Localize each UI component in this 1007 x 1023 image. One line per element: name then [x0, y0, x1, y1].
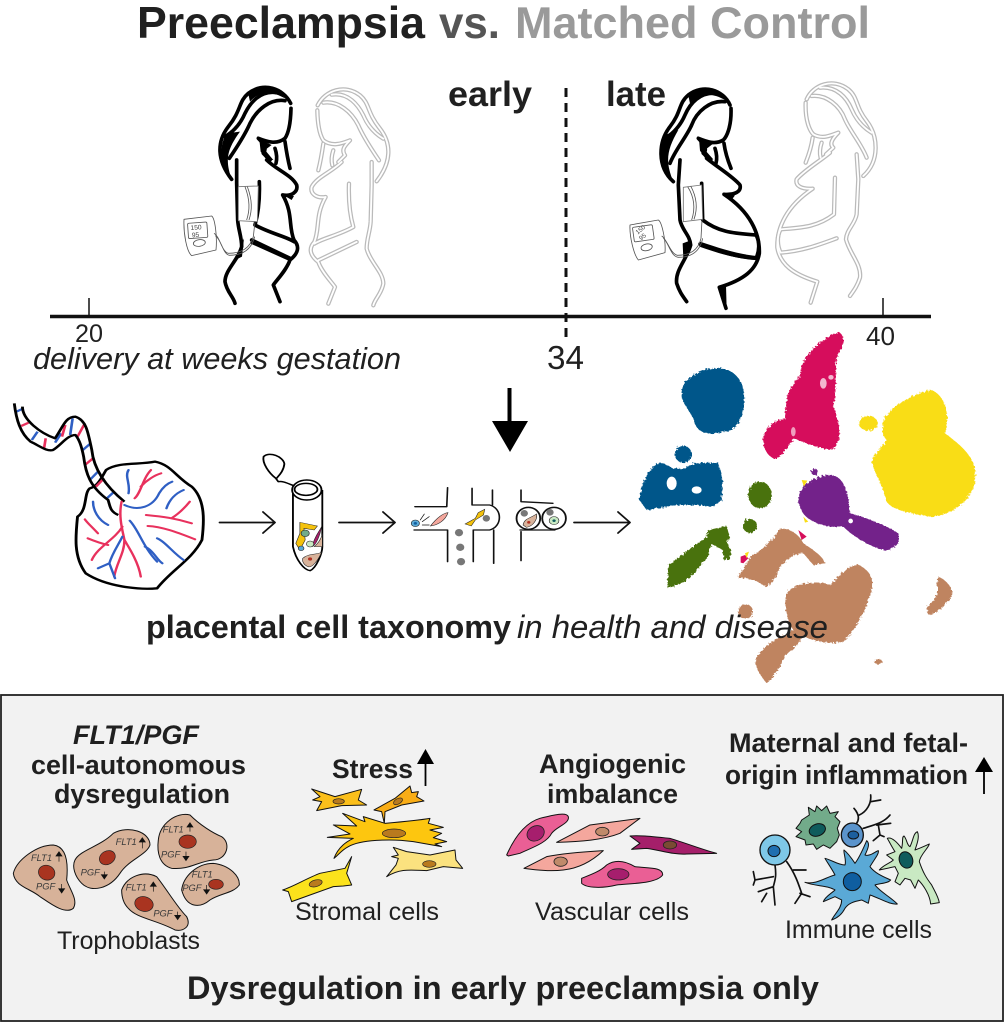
heading: inflammation up: origin inflammation — [725, 760, 968, 790]
icon: trophoblast cells: FLT1 — [116, 837, 137, 847]
title — [137, 0, 870, 48]
heading: angiogenic imbalance: imbalance — [547, 779, 678, 809]
figure: early preeclampsia woman with monitor: 95 — [192, 232, 200, 239]
title: Matched Control — [515, 0, 870, 48]
figure: late preeclampsia woman with monitor — [630, 89, 759, 309]
heading: angiogenic imbalance: Angiogenic — [539, 749, 686, 779]
figure: early preeclampsia woman with monitor — [184, 87, 298, 303]
heading: placental cell taxonomy: in health and disease — [517, 608, 828, 645]
heading: angiogenic imbalance — [539, 749, 686, 809]
icon: trophoblast cells: FLT1 — [31, 853, 52, 863]
figure: late preeclampsia woman with monitor: 95 — [638, 232, 648, 242]
icon: trophoblast cells: FLT1 — [126, 883, 147, 893]
figure: early matched control woman — [311, 89, 388, 305]
figure: early preeclampsia woman with monitor: 150 — [190, 224, 202, 232]
icon: immune cells — [753, 795, 939, 920]
label: early: early — [448, 74, 532, 114]
label: late: late — [606, 74, 666, 114]
heading: FLT1/PGF: FLT1/PGF — [73, 720, 200, 750]
immune column — [725, 728, 993, 944]
panel: dysregulation summary — [1, 695, 1003, 1021]
icon: stromal cells — [283, 786, 463, 902]
heading: placental cell taxonomy: placental cell taxonomy — [146, 609, 511, 645]
icon: trophoblast cells — [13, 814, 239, 930]
icon: trophoblast cells: PGF — [81, 868, 101, 878]
title: vs. — [439, 0, 500, 48]
heading: stress up: Stress — [332, 754, 413, 784]
icon: microfluidic chip — [411, 488, 566, 565]
icon: trophoblast cells: PGF — [161, 850, 181, 860]
heading: inflammation up — [725, 728, 993, 794]
heading: FLT1/PGF: dysregulation — [54, 779, 230, 809]
trophoblast column — [13, 720, 246, 955]
chart: single-cell cluster map — [639, 332, 975, 683]
heading: stress up — [332, 749, 434, 786]
icon: trophoblast cells: FLT1 — [192, 869, 213, 879]
timeline axis: delivery at weeks gestation — [33, 342, 401, 376]
timeline axis: 40 — [866, 321, 895, 351]
figure: late matched control woman — [777, 83, 876, 303]
arrow: chip to cell map — [574, 512, 630, 533]
timeline axis: 20 — [75, 320, 103, 348]
arrow: tube to microfluidic chip — [339, 512, 395, 533]
stromal column — [283, 749, 463, 926]
icon: trophoblast cells: PGF — [182, 883, 203, 893]
arrow: placenta to tube — [220, 512, 275, 533]
heading: FLT1/PGF — [31, 720, 246, 809]
title: Preeclampsia — [137, 0, 426, 48]
label: trophoblasts: Trophoblasts — [57, 928, 200, 955]
label: vascular cells: Vascular cells — [535, 898, 689, 926]
arrow: down to cell taxonomy — [492, 388, 528, 452]
heading: FLT1/PGF: cell-autonomous — [31, 750, 246, 780]
icon: trophoblast cells: FLT1 — [163, 825, 184, 835]
timeline axis: 34 — [547, 339, 584, 376]
timeline axis — [33, 88, 931, 376]
icon: vascular cells — [507, 814, 717, 887]
heading: placental cell taxonomy — [146, 608, 828, 645]
conclusion text: Dysregulation in early preeclampsia only — [187, 970, 819, 1006]
label: immune cells: Immune cells — [785, 916, 932, 944]
icon: dissociation tube with cells — [263, 454, 322, 571]
icon: placenta with umbilical cord — [14, 403, 203, 589]
label: stromal cells: Stromal cells — [295, 898, 439, 926]
icon: trophoblast cells: PGF — [36, 881, 56, 891]
icon: trophoblast cells: PGF — [153, 909, 174, 919]
figure: late preeclampsia woman with monitor: 150 — [635, 224, 648, 236]
heading: inflammation up: Maternal and fetal- — [729, 728, 968, 758]
vascular column — [507, 749, 717, 926]
